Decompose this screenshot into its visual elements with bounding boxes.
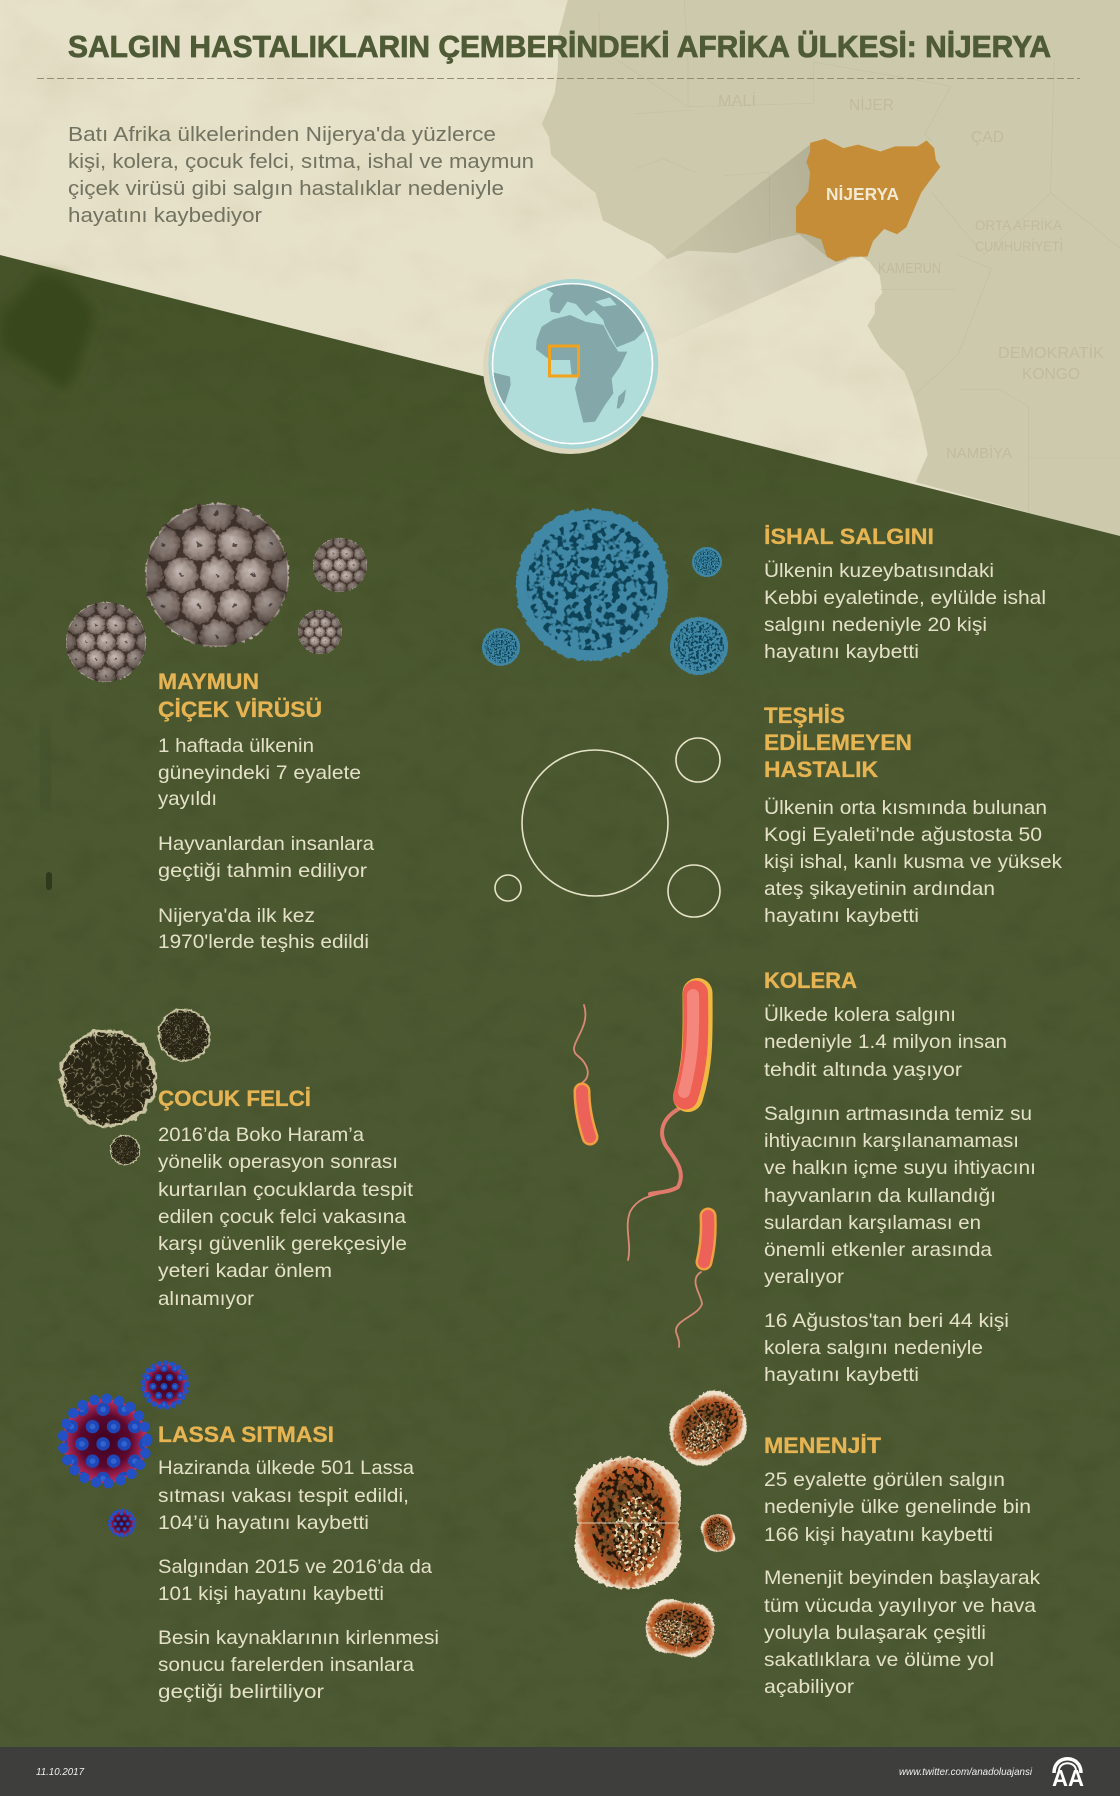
text: diarrhoea: salgını nedeniyle 20 kişi <box>764 614 987 636</box>
text: Lassa fever: Besin kaynaklarının kirlenmesi <box>158 1627 439 1649</box>
map country labels <box>718 91 1104 462</box>
icon: diarrhoea virus <box>482 509 728 675</box>
title: SALGIN HASTALIKLARIN ÇEMBERİNDEKİ AFRİKA ÜLKESİ: NİJERYA <box>68 29 1051 64</box>
text: cholera: kolera salgını nedeniyle <box>764 1337 983 1359</box>
intro text: çiçek virüsü gibi salgın hastalıklar nedeniyle <box>68 177 504 200</box>
text: cholera: hayvanların da kullandığı <box>764 1185 996 1207</box>
icon: meningitis bacteria <box>575 1381 757 1660</box>
panel: meningitis <box>575 1381 1040 1698</box>
heading: Lassa fever: LASSA SITMASI <box>158 1422 334 1447</box>
text: Lassa fever: geçtiği belirtiliyor <box>158 1681 325 1703</box>
map country labels: ÇAD <box>971 129 1004 146</box>
heading: undiagnosed disease <box>764 703 912 782</box>
text: undiagnosed disease: hayatını kaybetti <box>764 905 919 927</box>
text: cholera <box>764 1004 1036 1386</box>
heading: monkeypox: ÇİÇEK VİRÜSÜ <box>158 697 322 722</box>
text: cholera: önemli etkenler arasında <box>764 1239 992 1261</box>
text: meningitis <box>764 1469 1040 1698</box>
panel: diarrhoea <box>482 509 1046 675</box>
heading: undiagnosed disease: EDİLEMEYEN <box>764 730 912 755</box>
text: Lassa fever: 101 kişi hayatını kaybetti <box>158 1583 384 1605</box>
text: cholera: ihtiyacının karşılanamaması <box>764 1130 1019 1152</box>
map country labels: MALİ <box>718 91 756 110</box>
text: monkeypox <box>158 735 374 953</box>
intro text <box>68 123 534 227</box>
text: diarrhoea: hayatını kaybetti <box>764 641 919 663</box>
text: diarrhoea: Ülkenin kuzeybatısındaki <box>764 560 994 582</box>
text: monkeypox: güneyindeki 7 eyalete <box>158 762 361 784</box>
map country labels: KAMERUN <box>878 260 941 277</box>
text: meningitis: nedeniyle ülke genelinde bin <box>764 1496 1031 1518</box>
map country labels: CUMHURİYETİ <box>975 237 1063 254</box>
footer date: 11.10.2017 <box>36 1766 85 1778</box>
text: undiagnosed disease: Kogi Eyaleti'nde ağustosta 50 <box>764 824 1042 846</box>
icon: Lassa virus <box>63 1363 187 1536</box>
text: diarrhoea: Kebbi eyaletinde, eylülde ishal <box>764 587 1046 609</box>
map: Nigeria highlighted: NİJERYA <box>826 184 899 204</box>
text: polio: kurtarılan çocuklarda tespit <box>158 1179 414 1201</box>
text: undiagnosed disease: kişi ishal, kanlı kusma ve yüksek <box>764 851 1062 873</box>
text: meningitis: tüm vücuda yayılıyor ve hava <box>764 1595 1036 1617</box>
text: cholera: 16 Ağustos'tan beri 44 kişi <box>764 1310 1009 1332</box>
intro text: Batı Afrika ülkelerinden Nijerya'da yüzlerce <box>68 123 496 146</box>
text: meningitis: açabiliyor <box>764 1676 855 1698</box>
panel: cholera <box>574 968 1036 1386</box>
continents on globe <box>494 284 644 423</box>
heading: meningitis: MENENJİT <box>764 1433 882 1458</box>
text: Lassa fever: sonucu farelerden insanlara <box>158 1654 414 1676</box>
text: cholera: ve halkın içme suyu ihtiyacını <box>764 1157 1036 1179</box>
text: polio: yeteri kadar önlem <box>158 1260 332 1282</box>
text: cholera: tehdit altında yaşıyor <box>764 1059 963 1081</box>
map country labels: DEMOKRATİK <box>998 343 1104 362</box>
text: meningitis: Menenjit beyinden başlayarak <box>764 1567 1040 1589</box>
panel: undiagnosed disease <box>495 703 1062 927</box>
footer url: www.twitter.com/anadoluajansi <box>899 1766 1033 1778</box>
text: undiagnosed disease: ateş şikayetinin ardından <box>764 878 995 900</box>
intro text: hayatını kaybediyor <box>68 204 262 227</box>
text: monkeypox: Hayvanlardan insanlara <box>158 833 374 855</box>
text: cholera: Ülkede kolera salgını <box>764 1004 956 1026</box>
text: cholera: Salgının artmasında temiz su <box>764 1103 1032 1125</box>
icon: AA logo: AA <box>1052 1765 1084 1791</box>
heading: undiagnosed disease: HASTALIK <box>764 757 878 782</box>
text: diarrhoea <box>764 560 1046 663</box>
text: monkeypox: Nijerya'da ilk kez <box>158 905 315 927</box>
intro text: kişi, kolera, çocuk felci, sıtma, ishal ve maymun <box>68 150 534 173</box>
heading: diarrhoea: İSHAL SALGINI <box>764 524 934 549</box>
heading: cholera: KOLERA <box>764 968 857 993</box>
map country labels: KONGO <box>1022 366 1080 383</box>
footer bar <box>0 1747 1120 1796</box>
text: polio: 2016’da Boko Haram’a <box>158 1124 364 1146</box>
text: Lassa fever <box>158 1457 439 1703</box>
text: cholera: nedeniyle 1.4 milyon insan <box>764 1031 1007 1053</box>
text: polio: alınamıyor <box>158 1288 255 1310</box>
zoom beam from globe to Nigeria <box>614 145 847 346</box>
text: Lassa fever: Salgından 2015 ve 2016’da da <box>158 1556 432 1578</box>
heading: monkeypox <box>158 669 322 722</box>
heading: undiagnosed disease: TEŞHİS <box>764 703 845 728</box>
icon: monkeypox virus <box>66 503 367 682</box>
orange locator square <box>550 346 578 376</box>
text: Lassa fever: sıtması vakası tespit edildi, <box>158 1485 409 1507</box>
icon: empty circles <box>495 738 720 917</box>
text: cholera: hayatını kaybetti <box>764 1364 919 1386</box>
text: meningitis: 166 kişi hayatını kaybetti <box>764 1524 993 1546</box>
map country labels: NİJER <box>849 95 894 114</box>
text: polio: karşı güvenlik gerekçesiyle <box>158 1233 407 1255</box>
map country labels: ORTA AFRİKA <box>975 216 1063 233</box>
text: Lassa fever: 104’ü hayatını kaybetti <box>158 1512 369 1534</box>
text: monkeypox: 1 haftada ülkenin <box>158 735 314 757</box>
heading: monkeypox: MAYMUN <box>158 669 259 694</box>
text: undiagnosed disease <box>764 797 1062 927</box>
panel: polio <box>60 1009 414 1310</box>
text: meningitis: 25 eyalette görülen salgın <box>764 1469 1005 1491</box>
icon: cholera bacteria <box>574 993 708 1347</box>
panel: monkeypox <box>66 503 374 953</box>
text: meningitis: sakatlıklara ve ölüme yol <box>764 1649 994 1671</box>
text: Lassa fever: Haziranda ülkede 501 Lassa <box>158 1457 414 1479</box>
text: meningitis: yoluyla bulaşarak çeşitli <box>764 1622 986 1644</box>
paper stains <box>0 0 1120 540</box>
map country labels: NAMBİYA <box>946 444 1012 462</box>
text: polio: edilen çocuk felci vakasına <box>158 1206 406 1228</box>
panel: Lassa fever <box>63 1363 439 1703</box>
map: Nigeria highlighted <box>796 139 940 262</box>
text: monkeypox: 1970'lerde teşhis edildi <box>158 931 369 953</box>
text: monkeypox: geçtiği tahmin ediliyor <box>158 860 368 882</box>
globe locator <box>483 273 658 454</box>
text: monkeypox: yayıldı <box>158 788 217 810</box>
text: cholera: yeralıyor <box>764 1266 845 1288</box>
icon: polio virus <box>60 1009 210 1165</box>
map: land of West and Central Africa <box>542 0 1120 540</box>
text: polio: yönelik operasyon sonrası <box>158 1151 398 1173</box>
text: polio <box>158 1124 414 1310</box>
text: undiagnosed disease: Ülkenin orta kısmında bulunan <box>764 797 1047 819</box>
text: cholera: sulardan karşılaması en <box>764 1212 981 1234</box>
heading: polio: ÇOCUK FELCİ <box>158 1086 311 1111</box>
